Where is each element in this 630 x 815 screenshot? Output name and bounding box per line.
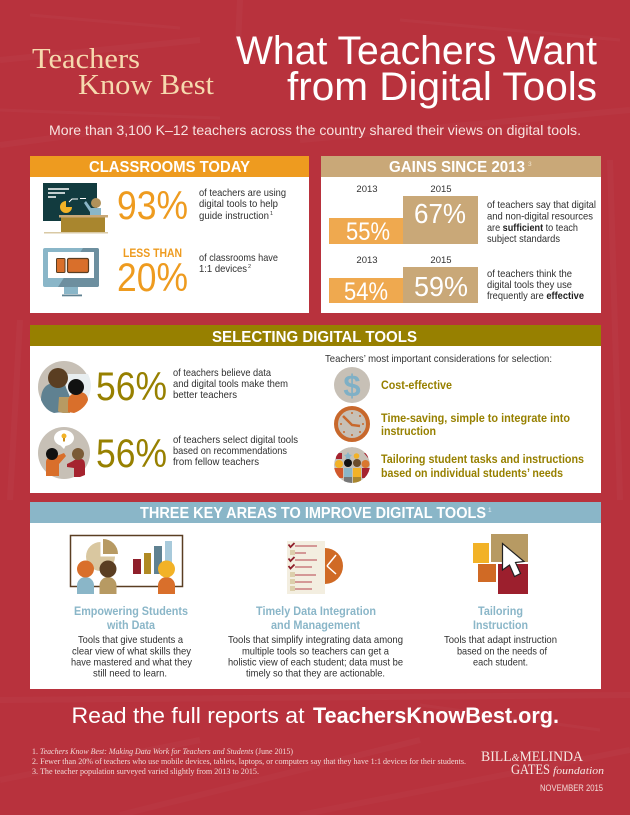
icon: teacher helping student	[38, 361, 91, 413]
date: NOVEMBER 2015	[540, 783, 603, 793]
text: tools are effective	[487, 268, 584, 302]
chart: tools effective 54% to 59%: 2015	[430, 255, 452, 266]
text: tailoring instruction: each student.	[473, 656, 528, 668]
text: recommendations from fellow teachers: based on recommendations	[173, 445, 287, 457]
title: What Teachers Want	[236, 29, 597, 73]
text: tailoring tasks: based on individual students’ needs	[381, 468, 563, 480]
title: from Digital Tools	[287, 65, 597, 109]
panel: three key areas	[30, 502, 601, 689]
icon: students viewing data	[70, 536, 182, 594]
chart: tools effective 54% to 59%: 59%	[414, 271, 468, 302]
text: empowering students: clear view of what skills they	[72, 646, 192, 658]
text: resources are sufficient: and non-digital resources	[487, 210, 593, 222]
text: timely data	[228, 604, 403, 680]
text: better teachers	[173, 367, 288, 401]
text: empowering students: with Data	[106, 618, 155, 632]
text: empowering students: Empowering Students	[74, 604, 188, 618]
text: tailoring instruction: Tools that adapt instruction	[444, 634, 557, 646]
heading: three key areas: THREE KEY AREAS TO IMPROVE DIGITAL TOOLS	[140, 505, 486, 522]
chart: resources sufficient 55% to 67%: 67%	[414, 198, 466, 229]
text: digital tools guide instruction: 1	[270, 211, 273, 217]
icon: checklist and clock	[287, 541, 343, 594]
text: recommendations from fellow teachers: of teachers select digital tools	[173, 434, 298, 446]
footnotes	[32, 746, 466, 776]
panel: gains since 2013	[321, 156, 601, 313]
stat: 56% recommendations: 56%	[96, 432, 167, 476]
text: empowering students	[71, 604, 193, 680]
icon: dollar sign	[334, 367, 370, 403]
icon: teacher at blackboard	[43, 183, 108, 234]
chart: resources sufficient 55% to 67%: 2013	[356, 184, 378, 195]
text: tools are effective: frequently are effective	[487, 290, 584, 302]
heading: classrooms today: CLASSROOMS TODAY	[89, 159, 251, 176]
text: tailoring instruction: based on the needs of	[457, 646, 547, 658]
text: classrooms with 1:1 devices: 2	[248, 264, 251, 270]
text: resources are sufficient: of teachers say that digital	[487, 199, 596, 211]
icon: blocks and cursor	[473, 534, 528, 594]
icon: dollar sign: $	[343, 368, 361, 403]
text: timely data: Timely Data Integration	[256, 604, 376, 618]
text: time-saving: instruction	[381, 426, 436, 438]
chart: resources sufficient 55% to 67%	[329, 184, 478, 246]
heading: gains since 2013: GAINS SINCE 2013	[389, 159, 525, 176]
text: cost-effective: Cost-effective	[381, 380, 452, 392]
call to action: TeachersKnowBest.org.	[313, 703, 559, 728]
title	[236, 29, 597, 109]
text: resources are sufficient: are sufficient to teach	[487, 222, 578, 234]
text: digital tools guide instruction	[199, 187, 286, 222]
logo: Bill & Melinda Gates Foundation: foundation	[553, 765, 605, 777]
text: considerations intro: Teachers’ most important considerations for selection:	[325, 353, 552, 365]
subtitle: More than 3,100 K–12 teachers across the country shared their views on digital tools.	[49, 122, 581, 138]
text: timely data: multiple tools so teachers can get a	[242, 646, 389, 658]
stat: 56% better teachers: 56%	[96, 365, 167, 409]
logo: Bill & Melinda Gates Foundation: GATES	[511, 762, 550, 778]
call to action	[72, 703, 559, 728]
text: digital tools guide instruction: of teachers are using	[199, 187, 286, 199]
footnotes: 3. The teacher population surveyed varied slightly from 2013 to 2015.	[32, 766, 259, 776]
heading: gains since 2013: 3	[528, 161, 532, 168]
heading: selecting digital tools: SELECTING DIGITAL TOOLS	[212, 329, 417, 346]
logo: Teachers Know Best: Teachers	[32, 44, 140, 75]
text: timely data: holistic view of each student; data must be	[228, 656, 403, 668]
text: digital tools guide instruction: guide instruction	[199, 210, 269, 222]
text: tailoring instruction	[444, 604, 557, 668]
logo: Teachers Know Best	[32, 44, 214, 101]
heading: three key areas: 1	[488, 507, 492, 514]
text: classrooms with 1:1 devices	[199, 252, 278, 275]
logo: Bill & Melinda Gates Foundation: BILL&MELINDA	[481, 749, 583, 765]
panel: selecting digital tools	[30, 325, 601, 493]
stat: less than 20%: 20%	[117, 256, 188, 300]
text: better teachers: and digital tools make them	[173, 378, 288, 390]
footnotes: 2. Fewer than 20% of teachers who use mobile devices, tablets, laptops, or computers say that they have 1:1 devices for their students.	[32, 756, 466, 766]
chart: tools effective 54% to 59%: 2013	[356, 255, 378, 266]
text: time-saving: Time-saving, simple to integrate into	[381, 413, 570, 425]
text: timely data: and Management	[271, 618, 360, 632]
text: tailoring instruction: Tailoring	[478, 604, 523, 618]
text: empowering students: Tools that give students a	[78, 634, 183, 646]
icon: group of students	[334, 447, 370, 483]
text: recommendations from fellow teachers: from fellow teachers	[173, 456, 259, 468]
chart: resources sufficient 55% to 67%: 2015	[430, 184, 452, 195]
text: tailoring tasks: Tailoring student tasks and instructions	[381, 454, 584, 466]
icon: clock	[336, 408, 368, 440]
text: empowering students: still need to learn.	[93, 668, 167, 680]
panel: classrooms today	[30, 156, 309, 313]
icon: computer monitor with tablets	[43, 248, 99, 296]
text: tailoring instruction: Instruction	[473, 618, 528, 632]
text: resources are sufficient: subject standards	[487, 233, 560, 245]
logo: Teachers Know Best: Know Best	[78, 70, 214, 101]
text: resources are sufficient	[487, 199, 596, 245]
stat: less than 20%: LESS THAN	[123, 248, 182, 260]
text: tailoring tasks	[381, 454, 584, 480]
chart: resources sufficient 55% to 67%: 55%	[346, 218, 390, 246]
text: digital tools guide instruction: digital tools to help	[199, 198, 278, 210]
text: better teachers: better teachers	[173, 389, 237, 401]
text: tools are effective: of teachers think the	[487, 268, 572, 280]
icon: teachers sharing an idea	[38, 427, 90, 479]
footnotes: 1. Teachers Know Best: Making Data Work for Teachers and Students (June 2015)	[32, 746, 293, 756]
text: empowering students: have mastered and what they	[71, 656, 193, 668]
text: better teachers: of teachers believe data	[173, 367, 271, 379]
text: recommendations from fellow teachers	[173, 434, 298, 468]
chart: tools effective 54% to 59%: 54%	[344, 278, 388, 306]
text: time-saving	[381, 413, 570, 438]
text: classrooms with 1:1 devices: 1:1 devices	[199, 263, 247, 275]
chart: tools effective 54% to 59%	[329, 255, 478, 306]
text: timely data: Tools that simplify integrating data among	[228, 634, 403, 646]
logo: Bill & Melinda Gates Foundation	[481, 749, 605, 778]
text: tools are effective: digital tools they use	[487, 279, 572, 291]
stat: 93%: 93%	[117, 184, 188, 228]
call to action: Read the full reports at	[72, 703, 304, 728]
text: classrooms with 1:1 devices: of classrooms have	[199, 252, 278, 264]
text: timely data: timely so that they are actionable.	[246, 668, 385, 680]
